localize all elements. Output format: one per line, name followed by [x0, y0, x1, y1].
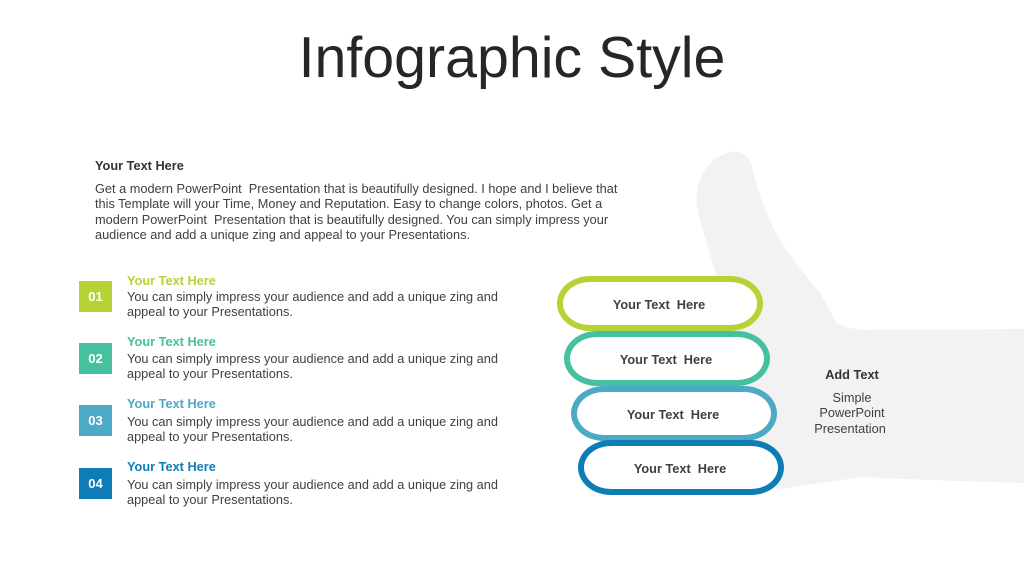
- pill: finger 4: [578, 440, 784, 495]
- item 01 text: appeal to your Presentations.: [127, 304, 293, 319]
- add text body: Simple: [832, 390, 871, 405]
- list item 01: [79, 273, 498, 319]
- pill: finger 4: Your Text Here: [634, 461, 726, 476]
- item 02 text: appeal to your Presentations.: [127, 366, 293, 381]
- title: Infographic Style: [299, 26, 725, 90]
- number badge 03: 03: [88, 413, 103, 428]
- item 03 text: [127, 414, 498, 444]
- intro paragraph: Get a modern PowerPoint Presentation that is beautifully designed. I hope and I believe that: [95, 181, 617, 196]
- list item 03: [79, 396, 498, 444]
- item 04 text: appeal to your Presentations.: [127, 492, 293, 507]
- item 04 text: You can simply impress your audience and add a unique zing and: [127, 477, 498, 492]
- add text body: PowerPoint: [819, 405, 885, 420]
- item 03 text: appeal to your Presentations.: [127, 429, 293, 444]
- text block: add text: [814, 367, 886, 436]
- item 01 text: You can simply impress your audience and add a unique zing and: [127, 289, 498, 304]
- item 02 heading: Your Text Here: [127, 334, 216, 349]
- text block: intro: [95, 158, 618, 242]
- item 03 text: You can simply impress your audience and add a unique zing and: [127, 414, 498, 429]
- list item 02: [79, 334, 498, 381]
- number badge 04: 04: [88, 476, 103, 491]
- pill: finger 1: [557, 276, 763, 331]
- item 01 heading: Your Text Here: [127, 273, 216, 288]
- add text body: Presentation: [814, 421, 886, 436]
- number badge 01: 01: [88, 289, 103, 304]
- intro paragraph: this Template will your Time, Money and Reputation. Easy to change colors, photos. Get a: [95, 196, 602, 211]
- intro paragraph: modern PowerPoint Presentation that is beautifully designed. You can simply impress your: [95, 212, 608, 227]
- pill: finger 2: Your Text Here: [620, 352, 712, 367]
- intro heading: Your Text Here: [95, 158, 184, 173]
- pill: finger 1: Your Text Here: [613, 297, 705, 312]
- item 01 text: [127, 289, 498, 319]
- number badge 01: [79, 281, 112, 312]
- item 04 heading: Your Text Here: [127, 459, 216, 474]
- pill: finger 3: [571, 386, 777, 440]
- item 02 text: [127, 351, 498, 381]
- intro paragraph: [95, 181, 618, 242]
- add text body: [814, 390, 886, 436]
- item 03 heading: Your Text Here: [127, 396, 216, 411]
- item 04 text: [127, 477, 498, 507]
- pill: finger 3: Your Text Here: [627, 406, 719, 422]
- number badge 02: 02: [88, 351, 103, 366]
- number badge 02: [79, 343, 112, 374]
- item 02 text: You can simply impress your audience and add a unique zing and: [127, 351, 498, 366]
- intro paragraph: audience and add a unique zing and appeal to your Presentations.: [95, 227, 470, 242]
- add text heading: Add Text: [825, 367, 879, 382]
- pill: finger 2: [564, 331, 770, 386]
- list item 04: [79, 459, 498, 507]
- number badge 04: [79, 468, 112, 499]
- number badge 03: [79, 405, 112, 436]
